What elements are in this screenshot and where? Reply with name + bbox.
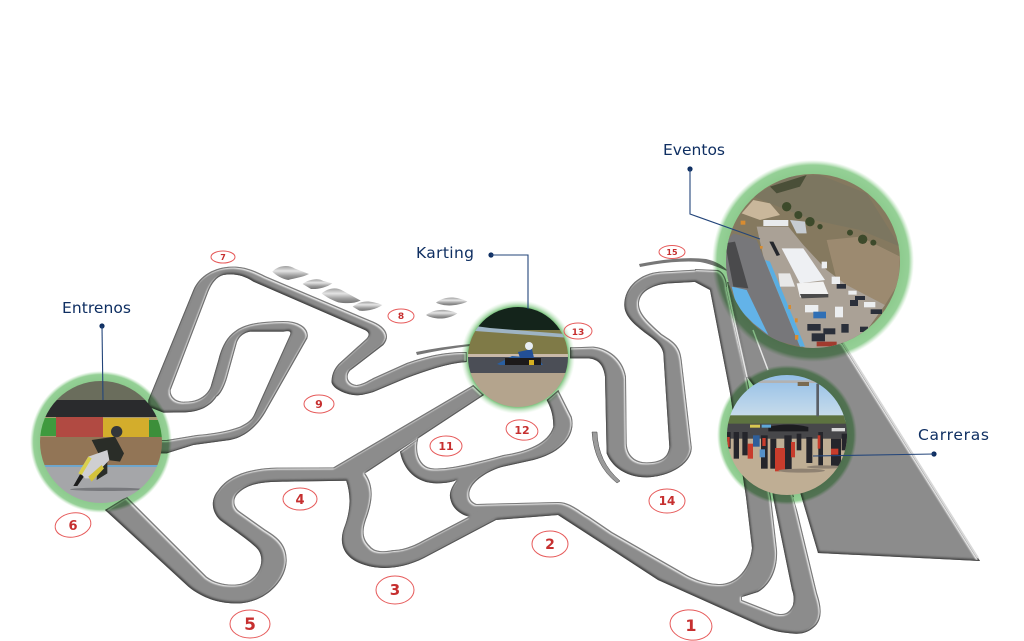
- badge 6: [53, 510, 93, 540]
- photo: Entrenos motorbike: [40, 380, 162, 507]
- badge 7: 7: [220, 253, 226, 262]
- label: Carreras: [813, 426, 989, 457]
- label: Entrenos: Entrenos: [62, 299, 131, 317]
- badge 2: 2: [545, 537, 555, 553]
- badge 12: 12: [514, 424, 530, 437]
- badge 7: [211, 251, 235, 263]
- label: Carreras: Carreras: [918, 426, 989, 444]
- label: Karting: [416, 244, 528, 309]
- kerb blocks: [272, 266, 309, 280]
- badge 13: [564, 323, 592, 339]
- photo ring: Carreras: [717, 365, 857, 505]
- sector 3: [342, 472, 496, 568]
- pit lane white lines: [727, 287, 978, 558]
- photo: Eventos aerial: [726, 174, 900, 348]
- circuit track: [105, 267, 980, 634]
- badge 4: 4: [295, 493, 305, 508]
- badge 9: [304, 395, 334, 413]
- photo: Karting: [465, 305, 571, 409]
- thin kerb near karting: [416, 344, 470, 355]
- photo ring: Eventos: [712, 160, 914, 362]
- badge 1: [668, 607, 714, 641]
- kerbs between turns 7 and 8: [272, 266, 467, 319]
- badge 15: 15: [666, 248, 678, 257]
- label: Entrenos: [62, 299, 131, 400]
- badge 5: [230, 610, 270, 638]
- thin kerb near turn 15: [639, 258, 729, 272]
- badge 1: 1: [685, 616, 697, 635]
- circuit infographic: [30, 144, 988, 641]
- sectors 1 and 2, main straight: [558, 269, 821, 634]
- photo ring: Karting: [461, 300, 575, 414]
- badge 14: 14: [659, 494, 675, 508]
- badge 8: 8: [398, 312, 404, 322]
- badge 9: 9: [315, 398, 323, 411]
- badge 13: 13: [572, 328, 584, 338]
- sectors 7 to 10: [148, 267, 467, 453]
- badge 8: [388, 309, 414, 323]
- photo ring: Entrenos: [30, 371, 172, 513]
- sectors 13 and 14: [570, 269, 700, 477]
- badge 6: 6: [68, 519, 78, 534]
- label: Karting: Karting: [416, 244, 474, 262]
- sectors 4 to 6: [105, 467, 353, 603]
- label: Eventos: [663, 141, 760, 239]
- badge 11: 11: [438, 440, 454, 453]
- badge 3: [376, 576, 414, 604]
- badge 2: [532, 531, 568, 557]
- badge 5: 5: [244, 615, 256, 635]
- badge 3: 3: [390, 581, 400, 599]
- diagonal link: [330, 385, 484, 477]
- photo: Carreras crowd: [725, 372, 850, 497]
- badge 15: [659, 246, 685, 258]
- thin kerb near turn 14: [592, 432, 620, 483]
- badge 14: [649, 489, 685, 513]
- label: Eventos: Eventos: [663, 141, 725, 159]
- badge 12: [505, 418, 539, 442]
- sectors 11 and 12: [400, 390, 573, 520]
- badge 4: [283, 488, 317, 510]
- turn number badges: [53, 246, 714, 641]
- badge 11: [430, 436, 462, 456]
- pit area: [727, 282, 980, 561]
